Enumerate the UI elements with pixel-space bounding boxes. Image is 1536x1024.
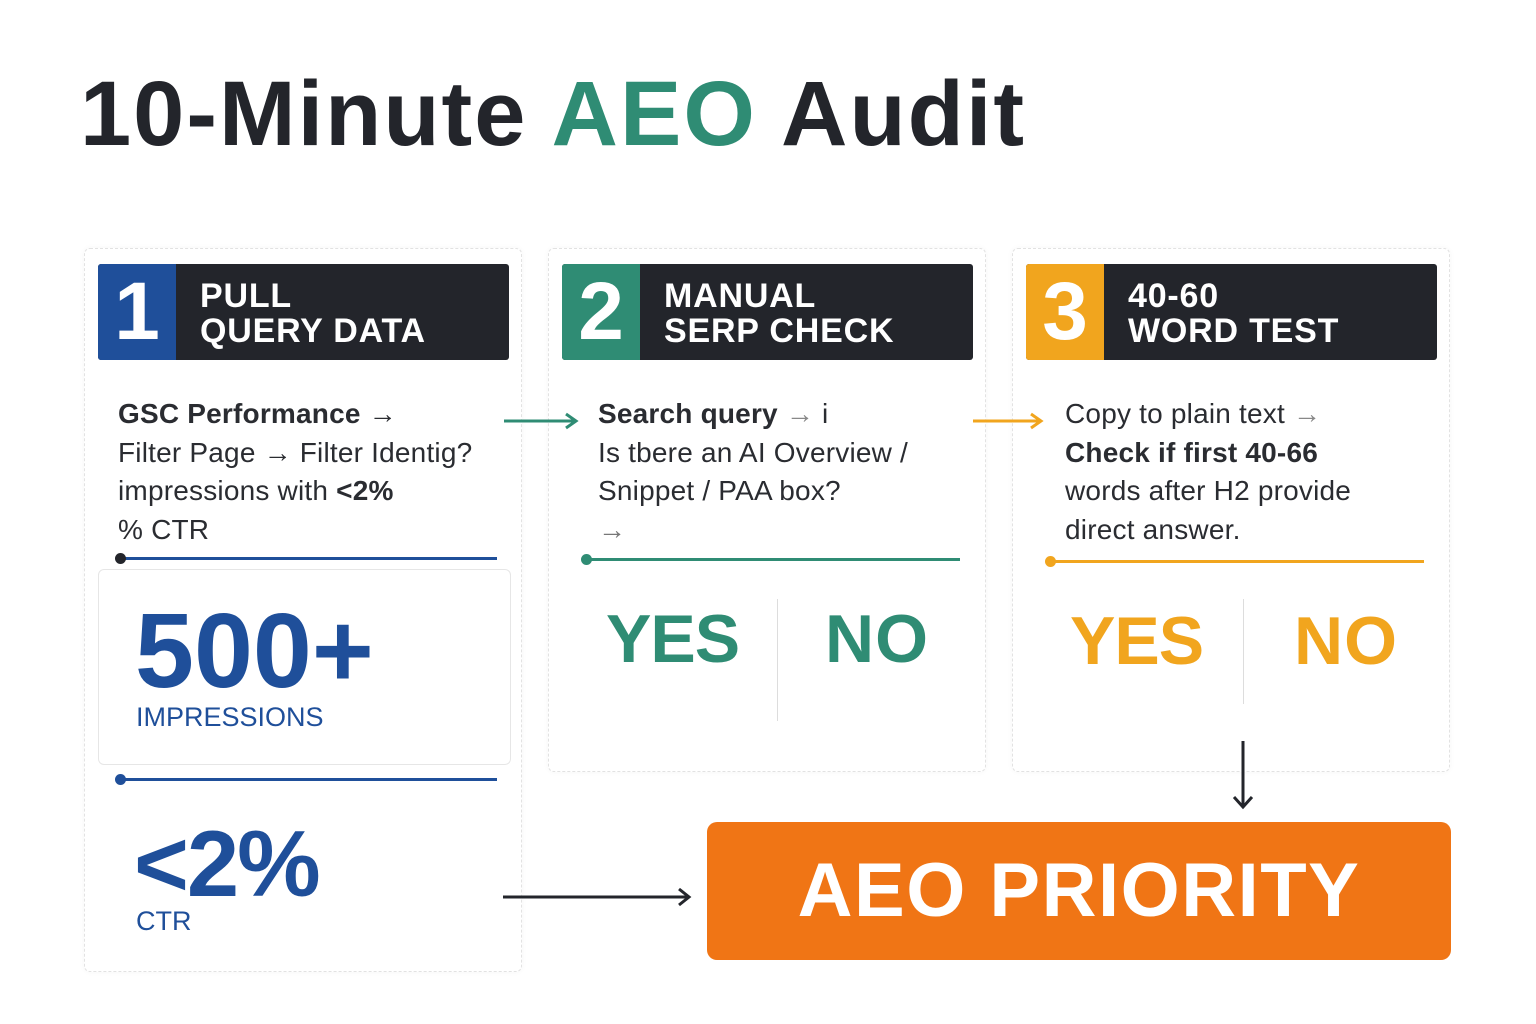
header 3	[1026, 264, 1437, 360]
header 3: 3	[1042, 266, 1088, 357]
yes / no	[606, 599, 929, 721]
arrow: step 3 down to priority	[1233, 741, 1253, 810]
text block 1: impressions with <2%	[118, 475, 394, 506]
text block 1: GSC Performance →	[118, 398, 397, 429]
header 1	[98, 264, 509, 360]
stat: <2% CTR: <2%	[134, 811, 319, 916]
arrow: step 2 to 3	[973, 412, 1044, 430]
text block 2: Snippet / PAA box?	[598, 475, 841, 506]
text block 3: direct answer.	[1065, 514, 1241, 544]
divider	[1049, 560, 1424, 563]
divider 1	[119, 557, 497, 560]
text block 3	[1065, 398, 1351, 544]
header 1: 1	[114, 266, 160, 357]
yes / no: YES	[606, 601, 739, 677]
header 2: MANUAL	[664, 277, 816, 315]
text block 1	[118, 398, 472, 544]
aeo priority box	[707, 822, 1451, 960]
text block 3: Check if first 40-66	[1065, 436, 1318, 468]
aeo priority box: AEO PRIORITY	[798, 848, 1360, 933]
header 1: PULL	[200, 277, 292, 315]
header 3: WORD TEST	[1128, 312, 1339, 350]
yes / no: NO	[825, 601, 929, 677]
stat: 500+ impressions: 500+	[135, 592, 374, 710]
title: 10-Minute AEO Audit	[80, 63, 1026, 165]
arrow: step 1 to 2	[504, 412, 578, 430]
stat: 500+ impressions	[98, 569, 511, 765]
panel: step 1 pull query data	[84, 248, 522, 972]
text block 2: Is tbere an AI Overview /	[598, 436, 908, 468]
text block 1: % CTR	[118, 514, 209, 544]
arrow: ctr to priority	[503, 888, 692, 906]
text block 2	[598, 398, 908, 544]
header 2: 2	[578, 266, 624, 357]
header 1: QUERY DATA	[200, 312, 426, 350]
divider 2	[119, 778, 497, 781]
stat: <2% CTR: CTR	[136, 906, 192, 936]
yes / no	[1070, 599, 1398, 704]
header 2	[562, 264, 973, 360]
header 3: 40-60	[1128, 277, 1219, 315]
text block 2: Search query → i	[598, 398, 828, 429]
yes / no: YES	[1070, 603, 1203, 679]
text block 1: Filter Page → Filter Identig?	[118, 436, 472, 468]
text block 2: →	[598, 514, 626, 544]
stat: 500+ impressions: IMPRESSIONS	[136, 702, 324, 732]
divider	[585, 558, 960, 561]
panel: step 2 manual serp check	[548, 248, 986, 772]
yes / no: NO	[1294, 603, 1398, 679]
text block 3: words after H2 provide	[1065, 475, 1351, 506]
header 2: SERP CHECK	[664, 312, 894, 350]
text block 3: Copy to plain text →	[1065, 398, 1321, 429]
panel: step 3 word test	[1012, 248, 1450, 772]
